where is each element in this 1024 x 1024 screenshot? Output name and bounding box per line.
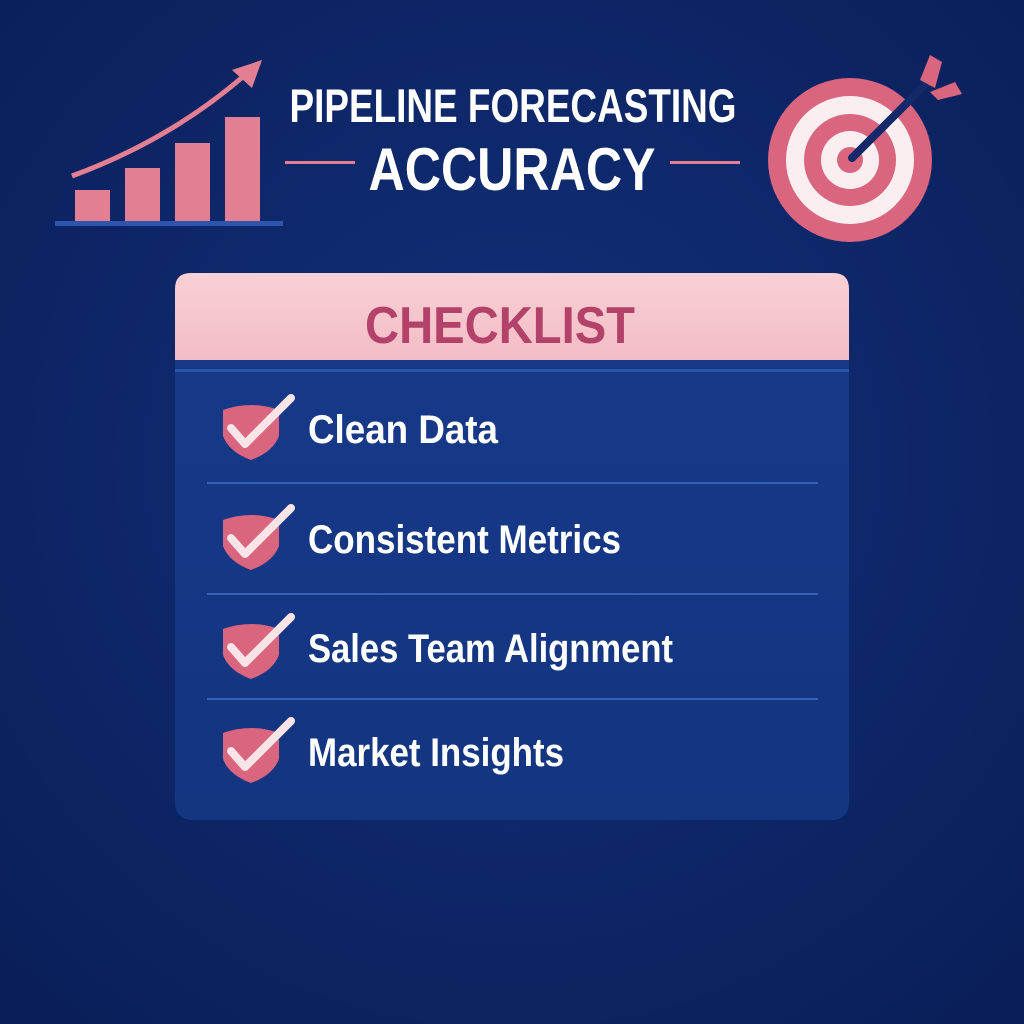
item: Sales Team Alignment: Sales Team Alignment	[308, 627, 673, 671]
icon: target with arrow	[768, 55, 962, 242]
checklist header: CHECKLIST	[365, 297, 635, 355]
title	[285, 79, 740, 203]
item: Clean Data	[223, 398, 499, 460]
item: Market Insights: Market Insights	[308, 731, 564, 775]
panel: checklist	[175, 273, 849, 820]
item: Sales Team Alignment	[223, 617, 673, 679]
item: Consistent Metrics: Consistent Metrics	[308, 518, 621, 562]
checklist header	[175, 273, 849, 360]
item: Clean Data: Clean Data	[308, 408, 499, 452]
item: Market Insights	[223, 721, 564, 783]
title: ACCURACY	[368, 136, 656, 203]
icon: bar chart with arrow	[55, 60, 283, 226]
item: Consistent Metrics	[223, 508, 621, 570]
title: PIPELINE FORECASTING	[290, 79, 736, 132]
